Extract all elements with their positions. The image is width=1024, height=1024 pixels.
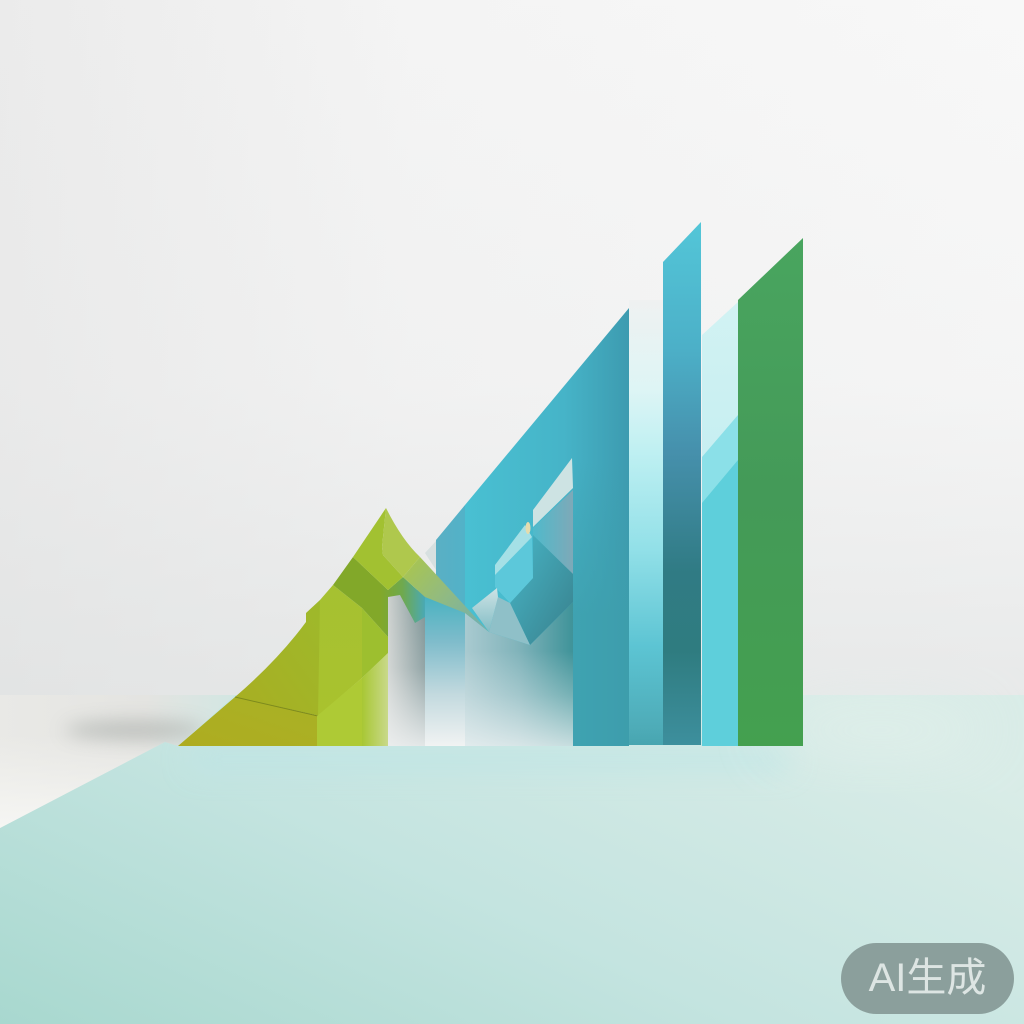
floor	[0, 695, 1024, 1024]
upper-left facet	[235, 600, 320, 716]
light diamond	[495, 537, 533, 603]
lower translucent facet	[489, 597, 530, 645]
badge: AI generated label	[841, 943, 1014, 1014]
bar: big teal diagonal panel	[425, 308, 629, 746]
crease line	[235, 697, 318, 716]
small tan spot	[526, 522, 530, 534]
fold below glass	[533, 490, 573, 574]
left grey floor with shadow	[0, 695, 235, 828]
centre panel	[318, 585, 362, 716]
right strip upper	[362, 608, 388, 678]
base line	[178, 745, 803, 747]
peak right facet	[382, 508, 420, 577]
upper glass strip	[533, 458, 573, 527]
bar: green column	[738, 238, 803, 746]
paper folds over teal panel	[472, 458, 573, 645]
diamond highlight	[495, 525, 532, 575]
lime triangle	[178, 508, 425, 746]
lower shaded face	[573, 308, 629, 746]
pale sliver	[425, 541, 436, 570]
background wall	[0, 0, 1024, 700]
dark fold	[333, 557, 425, 637]
lower glass chevron	[472, 588, 498, 632]
panel 3	[465, 600, 573, 746]
panel 1	[387, 590, 425, 746]
lower centre panel	[317, 678, 362, 746]
badge: AI generated label: AI生成	[869, 956, 986, 1000]
bar: fading white panels	[387, 590, 573, 746]
lime ribbon fold over panels	[403, 557, 489, 632]
left facet	[436, 505, 465, 613]
paper chart illustration	[0, 219, 1024, 1024]
dark fold	[510, 535, 573, 645]
lower-left facet	[178, 697, 318, 746]
main face	[465, 308, 629, 746]
panel 2	[425, 597, 465, 746]
bar: tall teal column	[663, 222, 701, 745]
bright upper facet	[353, 508, 403, 590]
bar: pale column	[629, 300, 663, 745]
bar: light cyan column	[702, 302, 738, 746]
right strip lower	[362, 653, 388, 746]
